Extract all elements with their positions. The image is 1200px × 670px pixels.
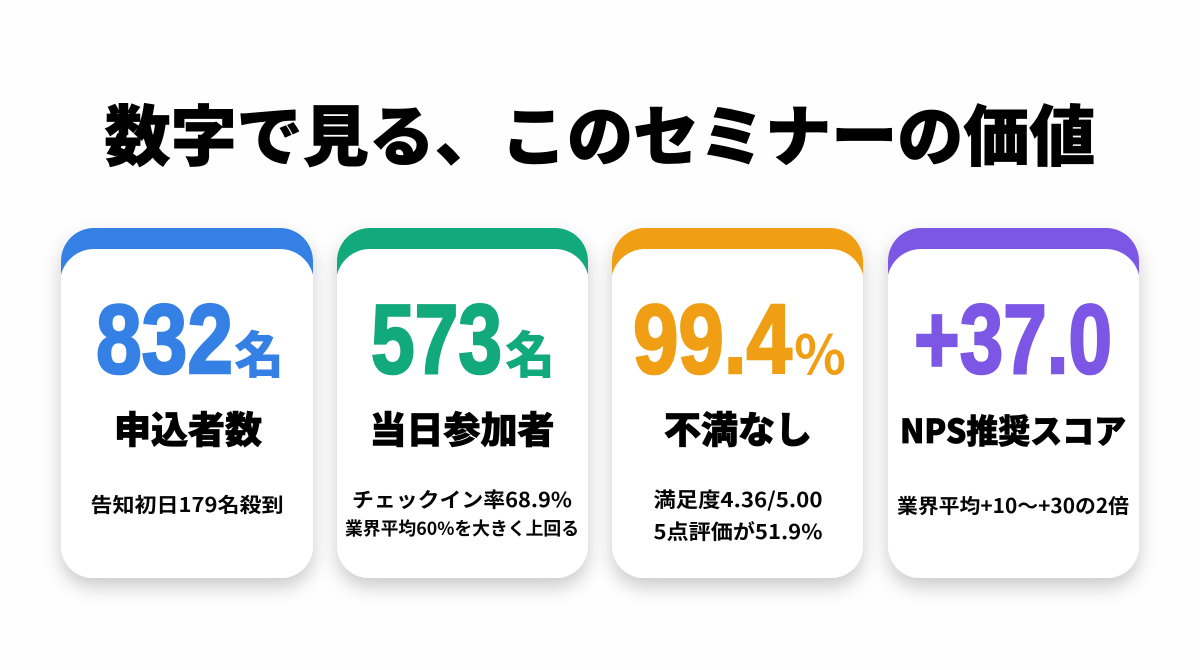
value: 99.4%: 99.4: [633, 284, 792, 394]
note: 告知初日: 告知初日179名殺到: [90, 489, 284, 518]
note: 5点評価: 5点評価が51.9%: [654, 515, 823, 545]
label: NPS推奨スコア: NPS推奨スコア: [900, 405, 1126, 453]
note: 満足度: 満足度4.36/5.00: [654, 483, 822, 513]
note: 業界平均+10: 業界平均+10～+30の2倍: [897, 490, 1129, 519]
label: 当日参加者: 当日参加者: [370, 400, 554, 454]
label: 不満なし: 不満なし: [664, 400, 812, 454]
label: 申込者数: 申込者数: [114, 400, 262, 454]
value: 573名: 573: [371, 284, 502, 394]
panel: NPS推奨スコア: [888, 228, 1139, 578]
panel: 当日参加者: [337, 228, 588, 578]
note: チェックイン率: チェックイン率68.9%: [352, 483, 572, 513]
title: 数字で見る、このセミナーの価値: [104, 84, 1096, 180]
panel: 不満なし: [612, 228, 863, 578]
value: 99.4%: %: [794, 311, 846, 390]
value: 832名: 832: [96, 284, 233, 394]
value: 832名: 名: [234, 316, 284, 388]
note: 業界平均60%: 業界平均60%を大きく上回る: [345, 515, 579, 541]
value: +37.0: +37.0: [914, 284, 1112, 394]
value: 573名: 名: [505, 316, 555, 388]
panel: 申込者数: [61, 228, 313, 578]
